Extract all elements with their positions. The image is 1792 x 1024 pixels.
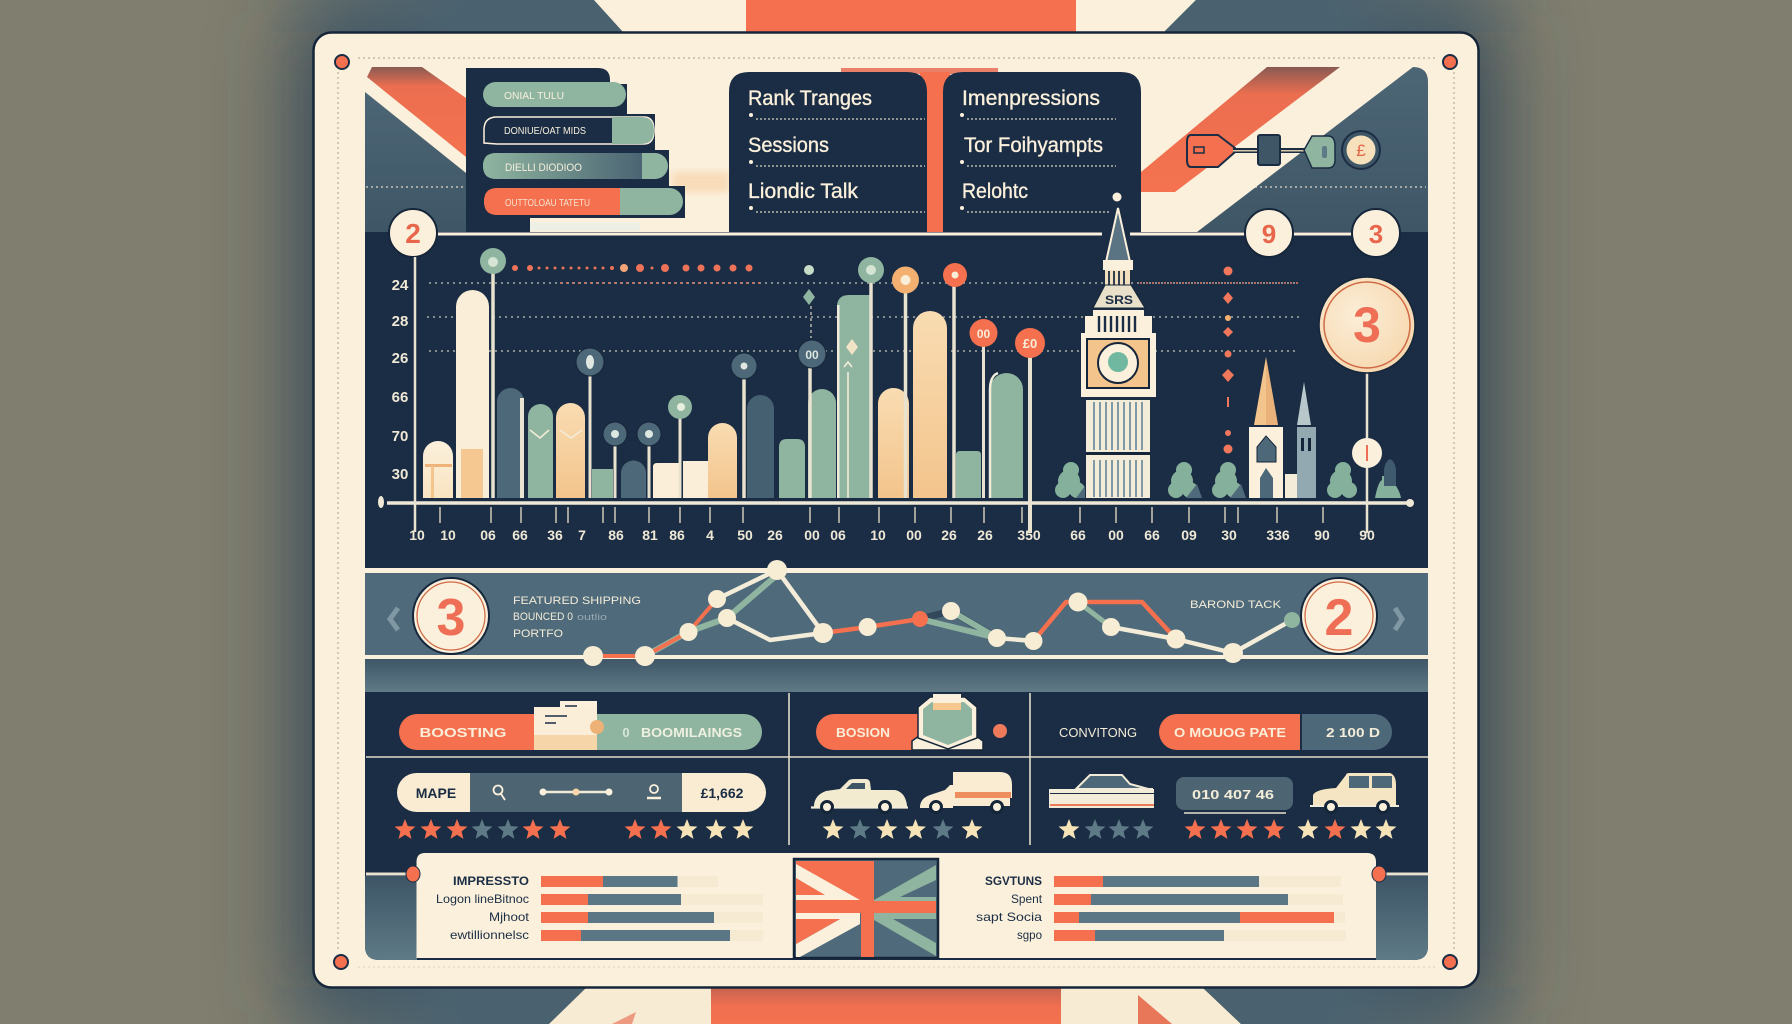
bar decoration xyxy=(530,362,852,498)
coral marker column xyxy=(1222,266,1234,454)
pin slate 3 xyxy=(603,422,627,498)
x axis labels: 26 xyxy=(977,527,993,543)
chevron left xyxy=(390,608,398,630)
x axis labels: 10 xyxy=(870,527,886,543)
left labels: Mjhoot xyxy=(489,910,530,924)
coral dot xyxy=(993,724,1007,738)
icon: delivery truck xyxy=(920,772,1012,812)
pill: session: BOSION xyxy=(836,725,890,740)
pill 4 xyxy=(484,188,683,215)
left labels: IMPRESSTO xyxy=(453,874,529,888)
pill: moving rate: 2 100 D xyxy=(1326,725,1380,740)
y axis labels: 30 xyxy=(392,466,408,483)
y axis labels: 28 xyxy=(392,313,408,330)
bar 6 xyxy=(592,469,613,498)
badge: 9: 9 xyxy=(1262,219,1276,249)
badge: 2 xyxy=(389,209,437,257)
x axis labels: 36 xyxy=(547,527,563,543)
Big Ben tower xyxy=(1081,192,1156,498)
pill 1 xyxy=(483,82,626,107)
main card xyxy=(314,32,1478,988)
pin coral 11 xyxy=(970,319,998,498)
y axis labels: 66 xyxy=(392,389,408,406)
badge: 3: 3 xyxy=(1369,219,1383,249)
pill: bounce: BOOSTING xyxy=(420,725,506,740)
panel: stacked pills xyxy=(466,68,685,232)
x axis labels: 90 xyxy=(1359,527,1375,543)
gridlines xyxy=(427,283,1299,351)
x axis labels: 00 xyxy=(1108,527,1124,543)
icon: shield badge xyxy=(912,694,983,750)
pin coral 10 xyxy=(943,263,967,498)
bar 3 xyxy=(497,388,524,498)
x axis labels: 66 xyxy=(1070,527,1086,543)
y axis labels: 26 xyxy=(392,350,408,367)
badge: 3 xyxy=(1352,209,1400,257)
frame corners: bottom right xyxy=(1376,876,1428,960)
heading: Tor Foihyampts: Tor Foihyampts xyxy=(964,134,1103,157)
x axis labels: 66 xyxy=(512,527,528,543)
dotted card border xyxy=(338,58,1454,967)
left labels: ewtillionnelsc xyxy=(450,928,529,942)
bar 9 xyxy=(683,461,713,498)
icon: pickup truck xyxy=(811,779,908,812)
band text left: PORTFO xyxy=(513,628,563,640)
star ratings: slate xyxy=(472,819,1153,839)
corner pin: bottom left xyxy=(334,955,348,969)
bar 16 xyxy=(913,311,947,498)
right labels: sapt Socia xyxy=(976,910,1042,924)
right labels: Spent xyxy=(1011,892,1043,906)
x axis labels: 336 xyxy=(1266,527,1290,543)
panel: metrics right xyxy=(943,72,1141,232)
pill: session xyxy=(816,714,925,750)
x axis labels: 10 xyxy=(440,527,456,543)
top banner flag right xyxy=(1141,67,1428,232)
bar 5 xyxy=(556,403,585,498)
x axis labels: 00 xyxy=(906,527,922,543)
red dot row xyxy=(512,264,752,272)
pin coral 12 xyxy=(1015,328,1045,533)
x axis labels: 66 xyxy=(1144,527,1160,543)
corner pin: top right xyxy=(1443,55,1457,69)
top banner flag left xyxy=(365,67,466,232)
x axis labels: 86 xyxy=(608,527,624,543)
pill: mape: £1,662 xyxy=(701,785,744,801)
bar 8 xyxy=(653,463,679,498)
pin slate 7: 00 xyxy=(805,348,819,362)
pin slate 7 xyxy=(798,340,826,498)
line chart xyxy=(593,570,1292,656)
x axis labels: 09 xyxy=(1181,527,1197,543)
line chart nodes xyxy=(583,560,1300,666)
pill: bounce xyxy=(399,714,762,750)
band badge: 2: 2 xyxy=(1325,589,1353,647)
frame corners: bottom left xyxy=(365,876,417,960)
pill 2 xyxy=(484,117,654,144)
pin green 5 xyxy=(668,395,692,498)
pin slate 4 xyxy=(637,422,661,498)
panel: metrics left xyxy=(729,72,927,232)
label: conversions: CONVITONG xyxy=(1059,725,1137,740)
x axis labels: 06 xyxy=(480,527,496,543)
bar 2 xyxy=(456,290,489,498)
bar 18 xyxy=(990,373,1023,498)
pill: mape xyxy=(397,773,766,812)
tree: far right xyxy=(1375,459,1401,498)
icon: folder xyxy=(534,701,604,750)
side rules xyxy=(366,872,1428,876)
line chart band xyxy=(365,570,1428,658)
box: value xyxy=(1176,777,1293,813)
church tower xyxy=(1297,382,1316,498)
pill 2: DONIUE/OAT MIDS xyxy=(504,126,586,137)
x axis labels: 4 xyxy=(706,527,714,543)
panel: bottom comparison xyxy=(406,853,1386,958)
x axis labels: 7 xyxy=(578,527,586,543)
band badge: 3 xyxy=(413,578,489,654)
pill 1: ONIAL TULU xyxy=(504,91,564,102)
pill: mape: MAPE xyxy=(416,785,456,801)
y axis labels: 70 xyxy=(392,428,408,445)
band text left: BOUNCED 0 xyxy=(513,611,573,623)
bar 10 xyxy=(708,423,737,498)
x axis labels: 30 xyxy=(1221,527,1237,543)
right labels xyxy=(976,874,1043,942)
callout medallion: 3 xyxy=(1353,297,1381,353)
star ratings: peach xyxy=(677,819,1396,839)
x axis labels: 90 xyxy=(1314,527,1330,543)
y axis labels: 24 xyxy=(392,277,409,294)
pins xyxy=(415,248,1045,533)
marker diamond xyxy=(846,339,858,355)
background flag: top xyxy=(260,0,1540,32)
x axis xyxy=(378,496,1414,508)
band text left: FEATURED SHIPPING xyxy=(513,595,641,607)
x axis labels: 50 xyxy=(737,527,753,543)
pill: moving rate: O MOUOG PATE xyxy=(1174,725,1286,740)
icon: union flag xyxy=(794,859,938,958)
coral header backing xyxy=(841,68,998,232)
x axis labels: 26 xyxy=(941,527,957,543)
lower slate band xyxy=(365,658,1428,692)
heading: Liondic Talk: Liondic Talk xyxy=(748,180,858,203)
star ratings: coral xyxy=(395,819,1345,839)
pin green 1 xyxy=(480,248,506,498)
bar 12 xyxy=(779,439,805,498)
panel: lower dashboard xyxy=(365,692,1428,960)
x axis ticks xyxy=(440,507,1323,523)
corner pin: top left xyxy=(335,55,349,69)
pin slate 6 xyxy=(731,353,757,498)
heading: Relohtc: Relohtc xyxy=(962,180,1028,203)
x axis labels: 00 xyxy=(804,527,820,543)
bar 13 xyxy=(808,389,836,498)
heading: Rank Tranges: Rank Tranges xyxy=(748,87,872,110)
icon: key chain xyxy=(1187,131,1380,169)
lower dashboard dividers xyxy=(366,693,1428,845)
x axis labels: 06 xyxy=(830,527,846,543)
right labels: sgpo xyxy=(1017,928,1042,942)
pin green 8 xyxy=(858,257,884,498)
pin slate 2 xyxy=(576,348,604,498)
pin coral 12: £0 xyxy=(1023,336,1037,351)
bar 17 xyxy=(956,451,981,498)
badge: 9 xyxy=(1245,209,1293,257)
panel: chart background xyxy=(365,232,1428,568)
chevron right xyxy=(1395,608,1402,630)
Big Ben tower: SRS xyxy=(1105,293,1133,307)
x axis labels: 86 xyxy=(669,527,685,543)
band badge: 2 xyxy=(1301,578,1377,654)
y axis labels xyxy=(392,277,409,483)
callout medallion xyxy=(1319,277,1415,533)
pill 3 xyxy=(483,153,668,179)
band badge: 3: 3 xyxy=(437,589,465,647)
left labels: Logon lineBitnoc xyxy=(436,892,529,906)
tree: right of tower xyxy=(1168,462,1202,498)
bar 11 xyxy=(747,395,774,498)
right bar list xyxy=(976,874,1346,942)
chart top rule xyxy=(437,232,1352,236)
bar 14 xyxy=(837,295,870,498)
tree: by church xyxy=(1212,462,1246,498)
x axis labels: 26 xyxy=(767,527,783,543)
pill: bounce: BOOMILAINGS xyxy=(641,725,742,740)
bar 15 xyxy=(878,388,909,498)
box: value: 010 407 46 xyxy=(1192,787,1274,802)
left labels xyxy=(436,874,530,942)
bar 4 xyxy=(528,404,553,498)
icon: long car xyxy=(1049,775,1154,808)
card shadow glow xyxy=(300,10,1495,1015)
pin coral 11: 00 xyxy=(977,327,990,341)
pill: bounce: 0 xyxy=(622,725,630,740)
corner pin: bottom right xyxy=(1443,955,1457,969)
pin peach 9 xyxy=(892,266,919,498)
pill: moving rate xyxy=(1159,714,1392,750)
background flag: bottom xyxy=(260,987,1540,1024)
right labels: SGVTUNS xyxy=(985,874,1042,888)
band text left: outlio xyxy=(577,612,607,622)
band text right: BAROND TACK xyxy=(1190,599,1282,611)
bar chart xyxy=(423,290,1023,498)
band rules xyxy=(363,569,1430,659)
bar 7 xyxy=(621,460,646,498)
left bar list xyxy=(436,874,763,942)
heading: Sessions: Sessions xyxy=(748,134,829,157)
church xyxy=(1249,357,1297,498)
icon: key chain: £ xyxy=(1356,141,1366,160)
icon: estate car xyxy=(1310,773,1399,812)
x axis labels: 81 xyxy=(642,527,658,543)
tree: left of tower xyxy=(1055,462,1085,498)
x axis labels: 350 xyxy=(1017,527,1041,543)
peach haze xyxy=(672,172,730,192)
band text left xyxy=(513,595,641,640)
heading: Impressions: Imenpressions xyxy=(962,87,1100,110)
pill 3: DIELLI DIODIOO xyxy=(505,162,582,174)
x axis labels: 10 xyxy=(409,527,425,543)
x axis labels xyxy=(409,527,1375,543)
badge: 2: 2 xyxy=(405,218,421,249)
tree: right xyxy=(1327,462,1357,498)
pill 4: OUTTOLOAU TATETU xyxy=(505,198,590,209)
green markers xyxy=(803,265,815,338)
bar 1 xyxy=(423,441,453,498)
